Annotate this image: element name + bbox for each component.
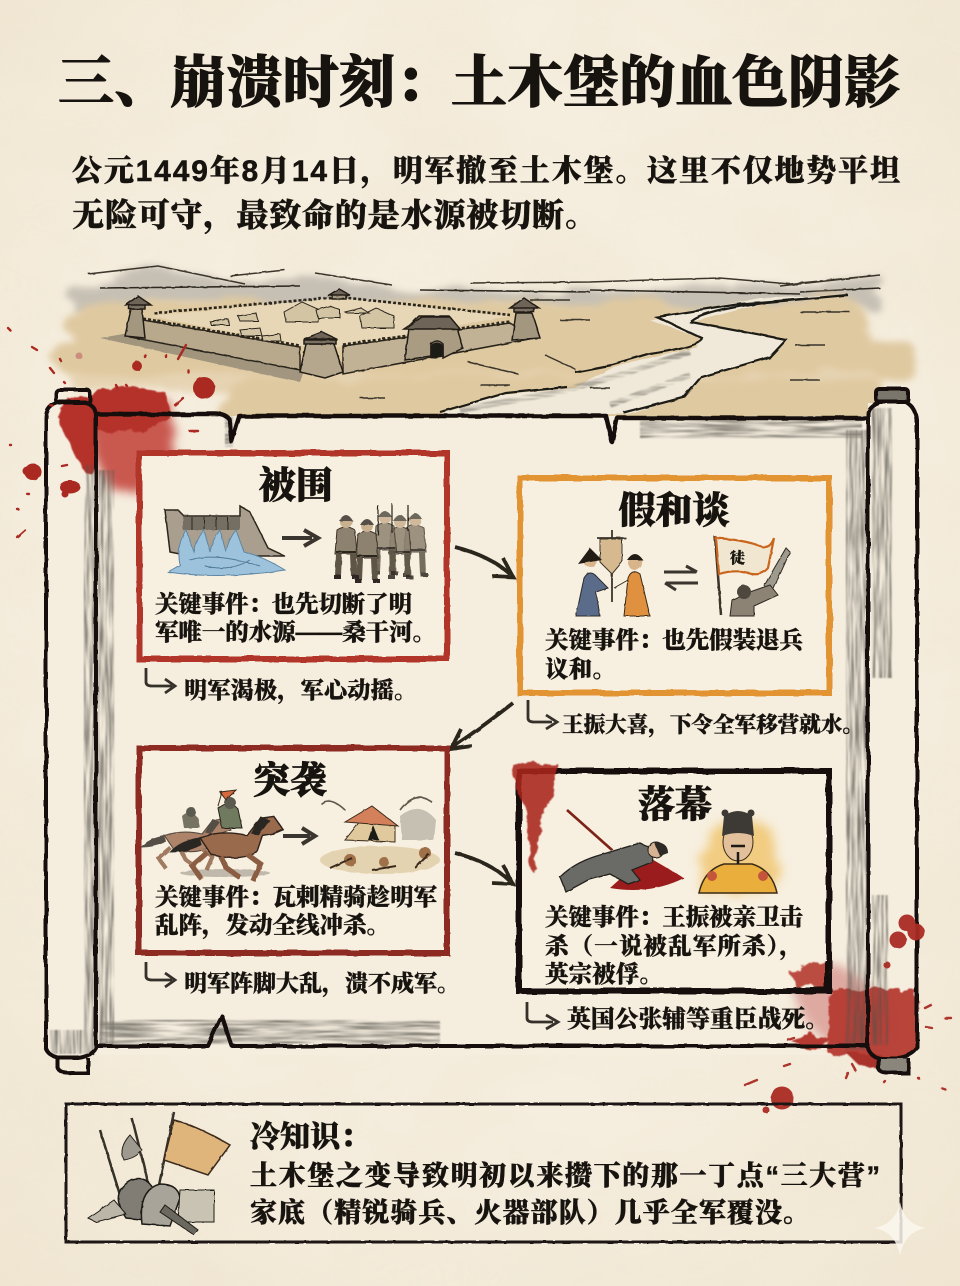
result: 英国公张辅: 英国公张辅等重臣战死。	[567, 1005, 829, 1033]
key event text: 关键事件：瓦剌精骑趁明军	[155, 883, 438, 910]
scroll bottom outline	[96, 1016, 870, 1046]
towers	[125, 289, 540, 378]
arrow: step 1 to 2	[455, 547, 513, 577]
right roller	[868, 389, 917, 1073]
result: 明军渴极	[146, 668, 417, 705]
interior buildings	[210, 302, 394, 341]
intro text: 公元1449年8月14日，明军撤至土木堡。这里不仅地势平坦	[72, 154, 900, 189]
panel: cold fact	[66, 1104, 901, 1242]
dry-brush ink washes	[50, 408, 892, 1054]
key event text: 英宗被俘。	[545, 960, 663, 987]
panel: 突袭	[139, 748, 447, 953]
key event text	[545, 903, 804, 987]
fortress	[100, 289, 540, 382]
result: 明军阵脚大乱	[146, 962, 460, 998]
icon: sparkle watermark	[874, 1202, 926, 1256]
sand wash	[55, 302, 915, 428]
scattered ink ticks	[360, 300, 850, 398]
arrow: step 2 to 3	[451, 703, 513, 749]
distant mountains	[70, 266, 880, 310]
title: 三、崩溃时刻：土木堡的血色阴影	[58, 51, 900, 114]
blood behind scroll: bottom right	[790, 963, 917, 1068]
splatter: bottom right drops	[745, 915, 951, 1113]
key event text: 杀（一说被乱军所杀），	[545, 932, 803, 961]
blood behind scroll: top left	[58, 388, 174, 491]
blood on panel corner	[512, 764, 558, 872]
landscape: Tumubao fortress and dry river	[55, 266, 915, 428]
result: 王振大喜	[528, 700, 864, 739]
key event text	[155, 883, 438, 940]
dry river	[440, 295, 848, 414]
icon: cavalry charge	[140, 790, 283, 881]
scroll outline	[96, 414, 868, 442]
key event text: 议和。	[545, 656, 616, 682]
arrow	[282, 530, 318, 546]
result: 王振大喜: 王振大喜，下令全军移营就水。	[562, 712, 864, 739]
icon: thirsty soldiers	[334, 503, 428, 581]
icon: exchange arrows	[664, 566, 698, 590]
key event text: 乱阵，发动全线冲杀。	[155, 911, 390, 940]
body text: 家底（精锐骑兵、火器部队）几乎全军覆没。	[250, 1197, 810, 1228]
key event text: 关键事件：也先切断了明	[155, 591, 412, 617]
panel: 假和谈	[520, 478, 829, 693]
heading: 假和谈	[618, 490, 730, 531]
icon: Emperor Yingzong	[699, 810, 777, 893]
splatter: top left drops	[8, 328, 214, 537]
key event text: 军唯一的水源——桑干河。	[155, 618, 436, 645]
scroll	[46, 388, 918, 1073]
scroll sheet	[46, 416, 918, 1055]
key event text: 关键事件：王振被亲卫击	[545, 903, 804, 930]
blood on lower right panel corner	[790, 960, 828, 990]
icon: camp in chaos	[320, 798, 440, 874]
icon: Oirat flag and soldier	[715, 536, 790, 616]
icon: two envoys and banner	[576, 530, 650, 616]
heading: 突袭	[253, 759, 327, 801]
key event text	[155, 591, 436, 645]
icon: fallen Wang Zhen	[560, 810, 684, 892]
body text: 土木堡之变导致明初以来攒下的那一丁点“三大营”	[250, 1160, 880, 1191]
arrow	[283, 828, 315, 844]
result: 明军渴极: 明军渴极，军心动摇。	[184, 677, 417, 705]
left roller	[46, 390, 96, 1073]
icon: abandoned weapons and helmets	[88, 1112, 230, 1235]
intro text	[72, 154, 900, 235]
result: 明军阵脚大乱: 明军阵脚大乱，溃不成军。	[184, 970, 460, 998]
key event text: 关键事件：也先假装退兵	[545, 627, 804, 653]
arrow: step 3 to 4	[455, 853, 513, 884]
roller paper	[46, 403, 918, 416]
heading: 冷知识：	[250, 1120, 370, 1154]
icon: dam releasing water	[165, 506, 285, 576]
icon: Oirat flag and soldier: 徒	[730, 549, 745, 567]
key event text	[545, 627, 804, 682]
heading: 落幕	[638, 784, 712, 825]
heading: 被围	[259, 465, 333, 506]
panel: 被围	[139, 453, 447, 659]
blood splatters	[8, 328, 951, 1113]
body text	[250, 1160, 880, 1228]
intro text: 无险可守，最致命的是水源被切断。	[72, 197, 597, 235]
panel: 落幕	[512, 764, 829, 991]
